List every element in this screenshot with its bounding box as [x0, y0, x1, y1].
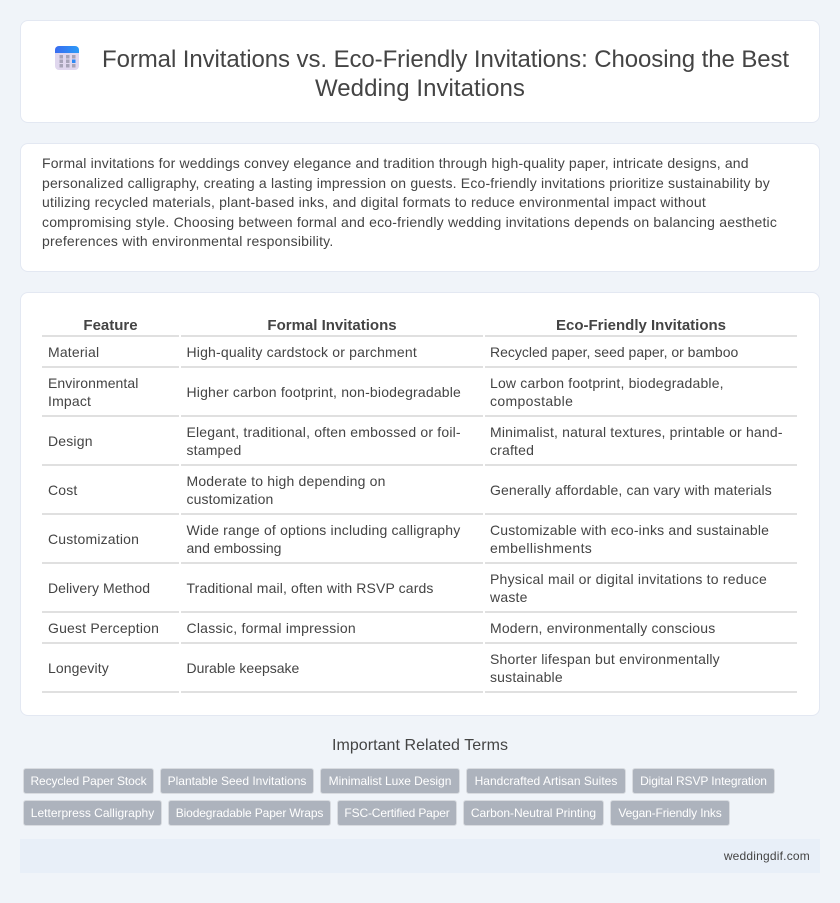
comparison table: Low carbon footprint, biodegradable,	[490, 374, 724, 390]
comparison table: Eco-Friendly Invitations	[556, 317, 726, 334]
intro paragraph: compromising style. Choosing between formal and eco-friendly wedding invitations depends on balancing aesthetic	[42, 214, 777, 230]
comparison table: Impact	[48, 392, 91, 408]
comparison table: High-quality cardstock or parchment	[186, 344, 417, 360]
comparison table: Design	[48, 432, 93, 448]
intro paragraph: utilizing recycled materials, plant-based inks, and digital formats to reduce environmental impact without	[42, 194, 706, 210]
intro paragraph: personalized calligraphy, creating a lasting impression on guests. Eco-friendly invitations prioritize sustainability by	[42, 175, 770, 191]
tag	[632, 768, 775, 794]
icon: calendar	[55, 46, 79, 70]
tag: Plantable Seed Invitations	[168, 774, 306, 788]
comparison table: stamped	[186, 442, 241, 458]
comparison table: customization	[186, 490, 273, 506]
comparison table: Durable keepsake	[186, 660, 299, 676]
comparison table: Customizable with eco-inks and sustainable	[490, 522, 769, 538]
tag: Vegan-Friendly Inks	[618, 806, 722, 820]
comparison table: Elegant, traditional, often embossed or foil-	[186, 424, 461, 440]
header card	[20, 20, 820, 123]
tag: Letterpress Calligraphy	[31, 806, 154, 820]
comparison table: Material	[48, 344, 99, 360]
comparison table: embellishments	[490, 540, 592, 556]
comparison table: Modern, environmentally conscious	[490, 620, 715, 636]
tag	[610, 800, 730, 826]
comparison table: Recycled paper, seed paper, or bamboo	[490, 344, 738, 360]
comparison table: crafted	[490, 442, 534, 458]
comparison table panel	[20, 292, 820, 716]
tag: Recycled Paper Stock	[30, 774, 147, 788]
tag: Carbon-Neutral Printing	[471, 806, 596, 820]
tag	[337, 800, 457, 826]
tag	[23, 800, 162, 826]
tag: FSC-Certified Paper	[344, 806, 450, 820]
comparison table: Cost	[48, 482, 78, 498]
tag	[160, 768, 314, 794]
comparison table	[42, 317, 797, 693]
tag: Digital RSVP Integration	[640, 774, 767, 788]
tag	[463, 800, 604, 826]
comparison table: Physical mail or digital invitations to reduce	[490, 570, 767, 586]
comparison table: Higher carbon footprint, non-biodegradable	[186, 384, 461, 400]
footer bar	[20, 839, 820, 873]
related terms heading: Important Related Terms	[332, 737, 508, 754]
comparison table: Generally affordable, can vary with materials	[490, 482, 772, 498]
title: Wedding Invitations	[315, 75, 525, 102]
tag: Handcrafted Artisan Suites	[475, 774, 617, 788]
comparison table: Shorter lifespan but environmentally	[490, 650, 720, 666]
comparison table: Customization	[48, 530, 139, 546]
tag	[168, 800, 331, 826]
comparison table: Minimalist, natural textures, printable or hand-	[490, 424, 783, 440]
related terms tags	[23, 768, 775, 826]
comparison table: Wide range of options including calligraphy	[186, 522, 460, 538]
comparison table: Moderate to high depending on	[186, 472, 386, 488]
intro panel	[20, 143, 820, 272]
comparison table: Delivery Method	[48, 580, 150, 596]
tag	[466, 768, 626, 794]
footer site name: weddingdif.com	[724, 849, 810, 863]
title: Formal Invitations vs. Eco-Friendly Invitations: Choosing the Best	[102, 46, 789, 73]
comparison table: Guest Perception	[48, 620, 159, 636]
comparison table: Traditional mail, often with RSVP cards	[186, 580, 434, 596]
tag	[320, 768, 460, 794]
comparison table: and embossing	[186, 540, 281, 556]
comparison table: Classic, formal impression	[186, 620, 356, 636]
comparison table: Formal Invitations	[267, 317, 397, 334]
comparison table: Feature	[83, 317, 138, 334]
tag	[23, 768, 154, 794]
tag: Minimalist Luxe Design	[329, 774, 451, 788]
comparison table: sustainable	[490, 668, 563, 684]
intro paragraph: preferences with environmental responsibility.	[42, 233, 333, 249]
tag: Biodegradable Paper Wraps	[176, 806, 323, 820]
comparison table: waste	[490, 588, 528, 604]
intro paragraph: Formal invitations for weddings convey elegance and tradition through high-quality paper, intricate designs, and	[42, 155, 749, 171]
title	[102, 46, 789, 102]
intro paragraph	[42, 155, 777, 249]
comparison table: compostable	[490, 392, 573, 408]
comparison table: Environmental	[48, 374, 138, 390]
comparison table: Longevity	[48, 660, 109, 676]
